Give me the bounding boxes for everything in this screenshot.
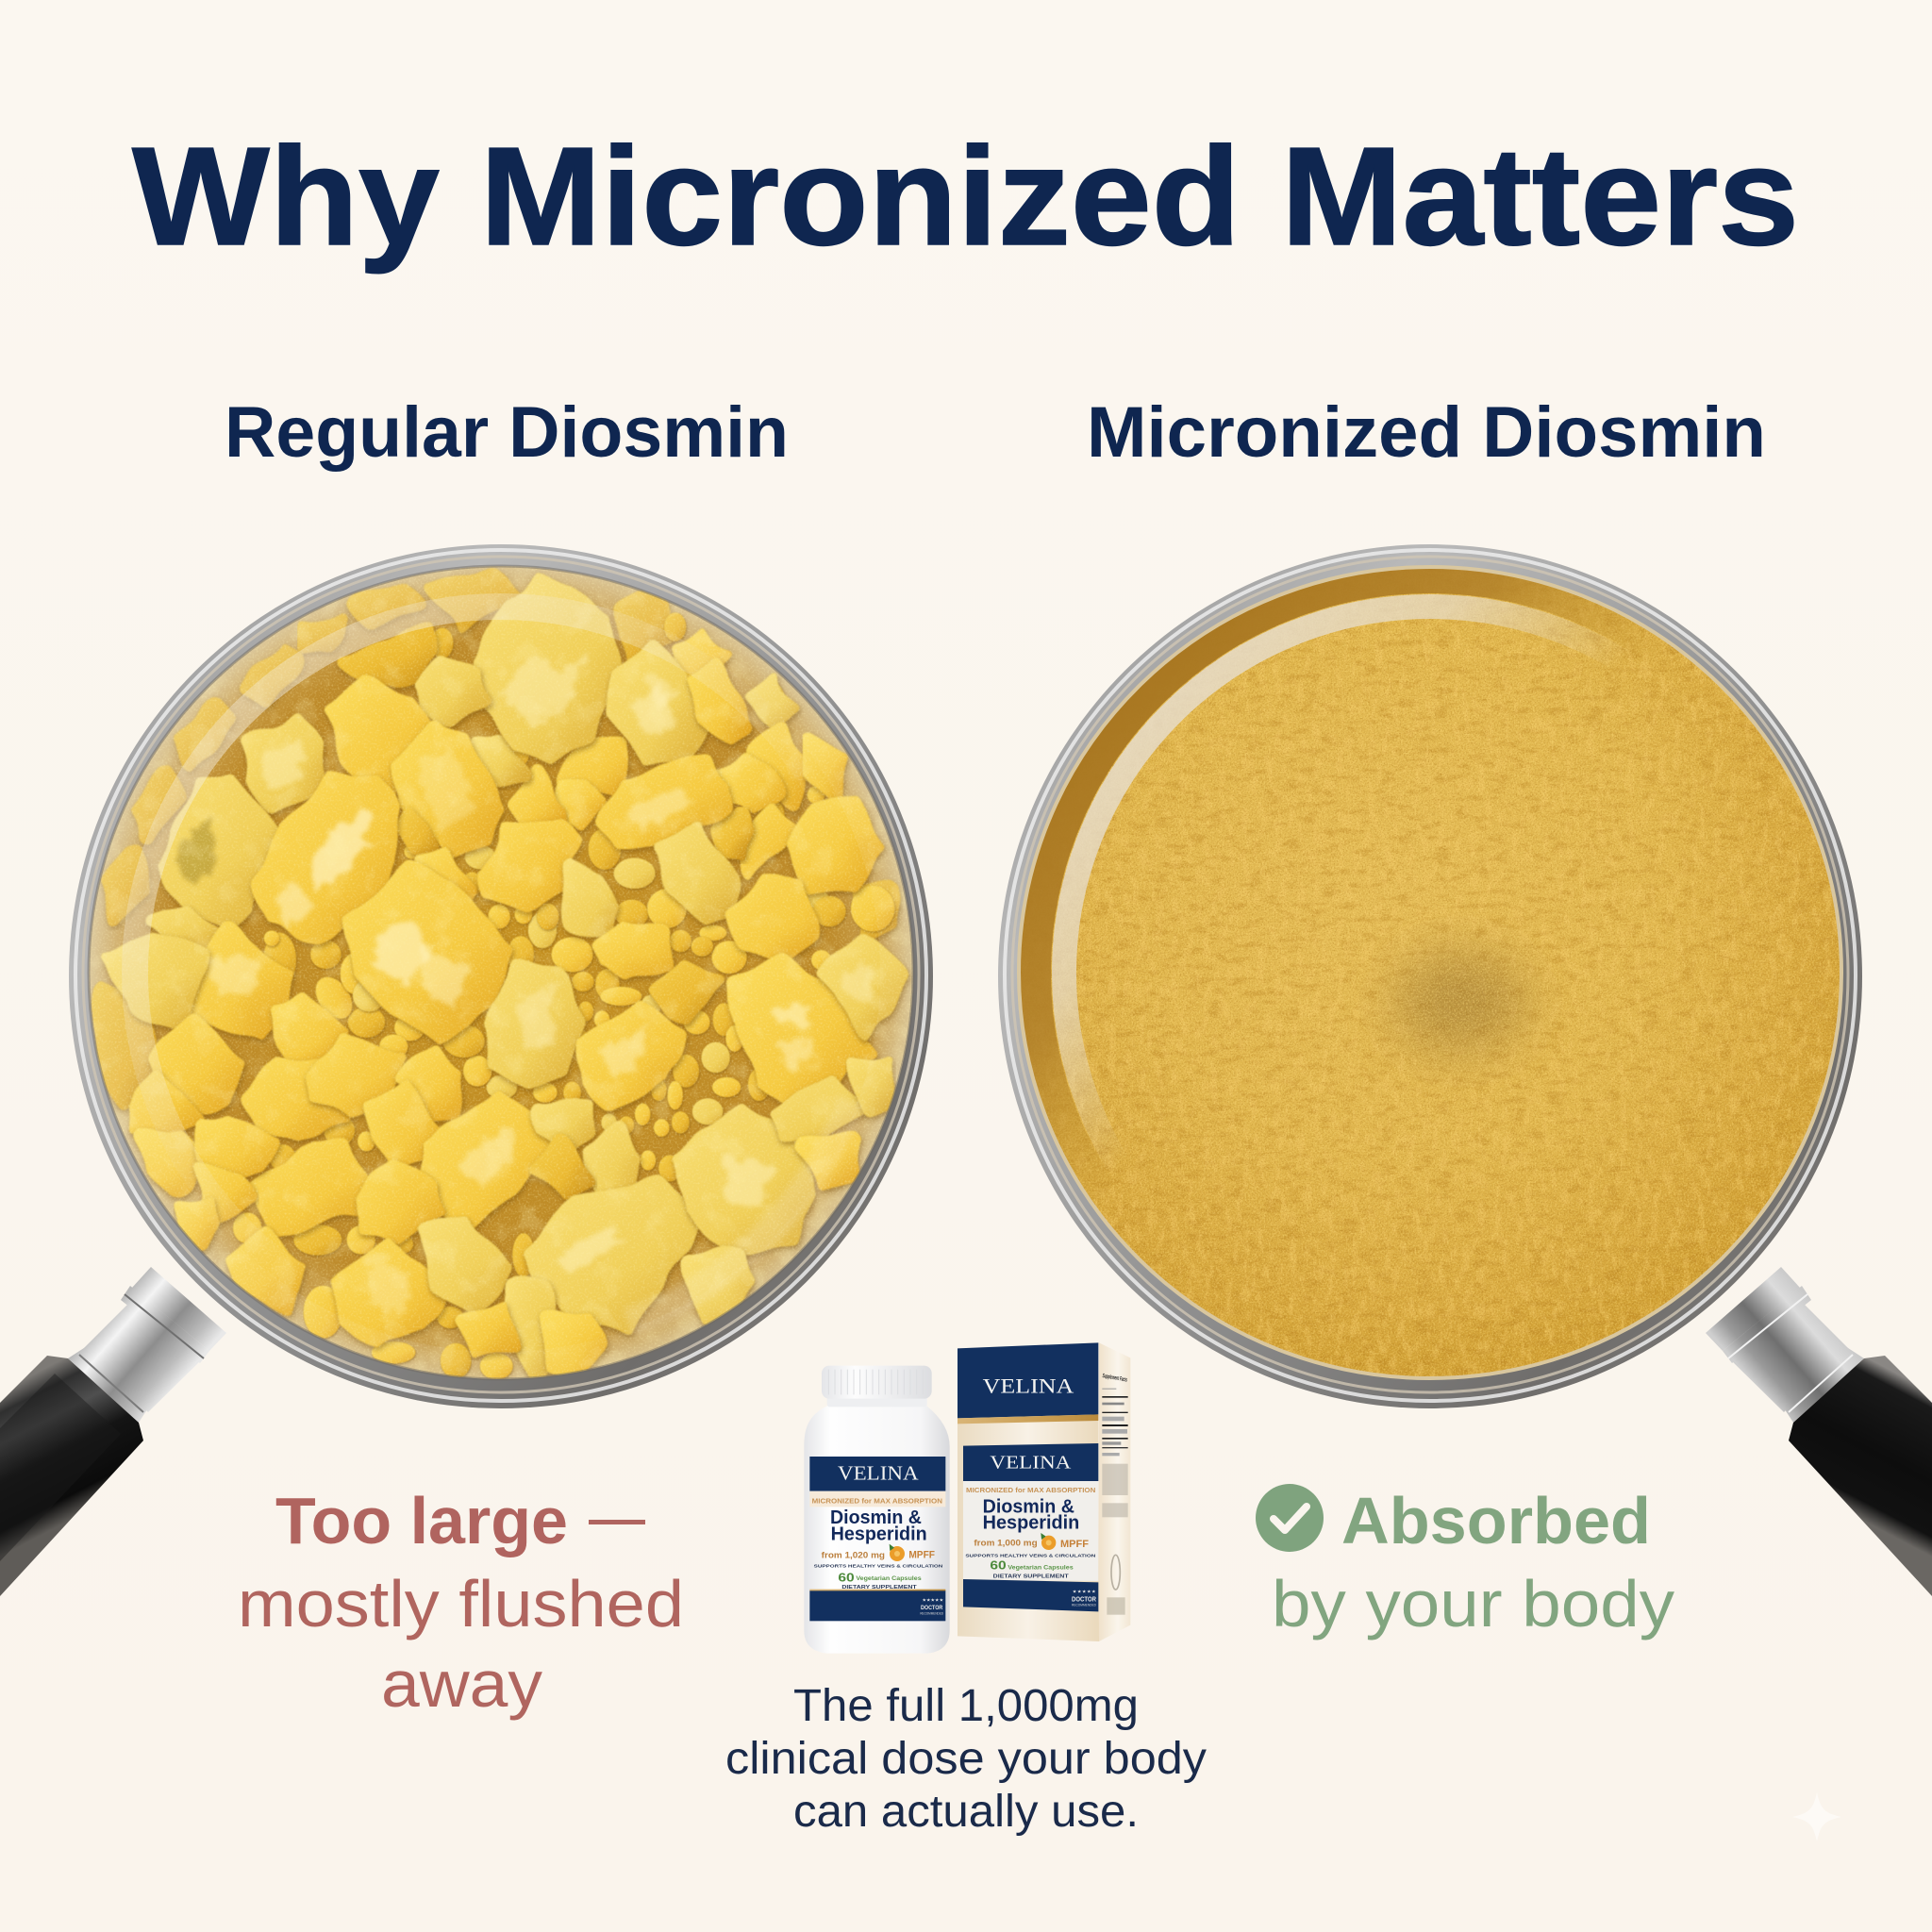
powder light grain [1009,557,1858,1387]
box front panel: RECOMMENDED [1072,1603,1096,1607]
product image: bottle and box [804,1342,1130,1654]
box front panel: DIETARY SUPPLEMENT [993,1574,1070,1580]
bottle: MICRONIZED for MAX ABSORPTION [812,1499,942,1506]
box front panel: DOCTOR [1072,1594,1097,1603]
box side panel: Supplement Facts [1102,1373,1128,1384]
box front panel: SUPPORTS HEALTHY VEINS & CIRCULATION [965,1553,1096,1558]
bottle: from 1,020 mg [822,1550,885,1559]
icon: right magnifying glass handle [1706,1267,1932,1596]
callout: absorbed [1272,1484,1674,1641]
box front panel [958,1342,1099,1641]
powder dark streak texture [1051,594,1837,1375]
panel: micronized diosmin lens with fine powder [998,544,1862,1408]
bottle: MPFF [908,1549,935,1560]
icon: faint sparkle [1792,1792,1841,1841]
olive shade on dark chunk [177,817,215,887]
large chunks [107,584,900,1379]
box side panel [1099,1342,1130,1641]
bottle: RECOMMENDED [920,1610,943,1615]
callout: too large: away [381,1647,542,1721]
powder light streak texture [1052,593,1840,1376]
caption text: clinical dose your body [725,1734,1207,1784]
box front panel: VELINA [990,1453,1072,1474]
bottle: DIETARY SUPPLEMENT [841,1585,918,1591]
bottle: DOCTOR [921,1605,942,1611]
bottle: ★★★★★ [922,1597,943,1602]
panel: regular diosmin lens with large chunks [69,544,933,1408]
icon: check mark badge [1256,1484,1324,1552]
box front panel: from 1,000 mg [974,1539,1038,1548]
bottle: Diosmin & [830,1507,922,1528]
bottle: SUPPORTS HEALTHY VEINS & CIRCULATION [814,1563,943,1568]
amber crescent at rim [1034,576,1826,1369]
box front panel: ★★★★★ [1073,1589,1097,1593]
box front panel: MICRONIZED for MAX ABSORPTION [966,1488,1095,1494]
callout: absorbed: by your body [1272,1567,1674,1641]
caption text: can actually use. [793,1787,1139,1837]
icon: left magnifying glass handle [0,1267,226,1596]
cream marbling on chunks [85,557,924,1387]
heading: micronized diosmin: Micronized Diosmin [1087,392,1766,473]
box front panel: MPFF [1060,1539,1089,1550]
fine speckle on chunks [85,557,924,1387]
callout: too large: Too large [275,1484,568,1557]
gloss arc lower right [628,1100,851,1323]
pale highlights on chunks [209,654,875,1315]
callout: too large: mostly flushed [238,1567,684,1641]
bottle: 60 [838,1570,855,1584]
faded chunks behind the lens edge [101,578,894,1104]
powder base [1018,566,1842,1379]
callout: absorbed: Absorbed [1341,1484,1651,1557]
box front panel: Diosmin & [983,1496,1074,1517]
callout: too large [238,1484,684,1721]
glass reflection ring [122,593,825,1275]
outer glass wash [105,576,897,1369]
box front panel: 60 [990,1557,1007,1572]
heading: regular diosmin: Regular Diosmin [225,392,789,473]
bottle [804,1366,950,1654]
box front panel: Vegetarian Capsules [1008,1564,1074,1571]
bottle: Vegetarian Capsules [856,1575,922,1582]
bottle: Hesperidin [831,1524,927,1544]
caption text [725,1681,1207,1837]
small pebbles between chunks [233,613,894,1379]
title: Why Micronized Matters [132,119,1799,275]
bottle: VELINA [838,1463,919,1484]
box front panel: VELINA [983,1374,1074,1398]
caption text: The full 1,000mg [793,1681,1139,1731]
glass reflection ring [1064,607,1796,1339]
powder dimple shadow [1394,953,1526,1051]
box front panel: Hesperidin [983,1513,1079,1534]
powder grain [1009,557,1858,1387]
